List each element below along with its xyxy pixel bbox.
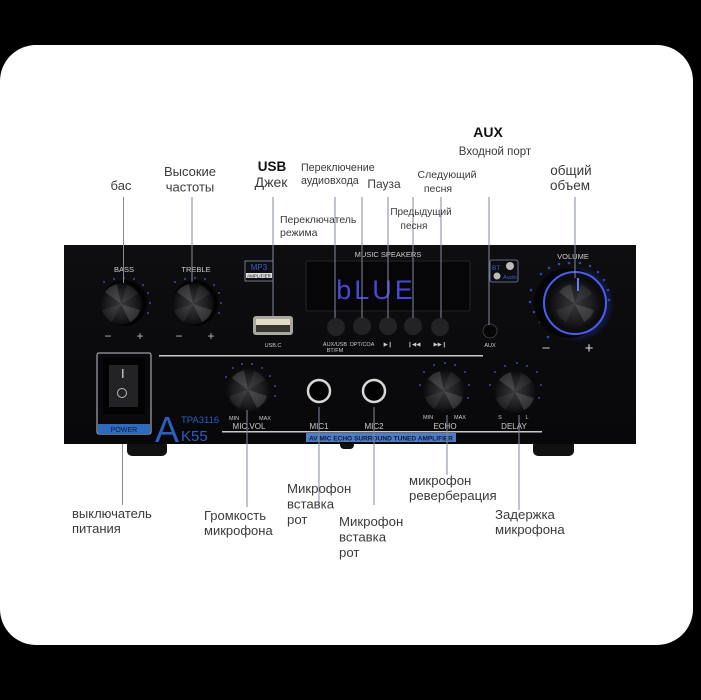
knob: volume bbox=[529, 252, 614, 357]
AK55 logo bbox=[155, 409, 219, 450]
label: next song: Следующий bbox=[418, 169, 477, 181]
label: mic delay: микрофона bbox=[495, 522, 565, 537]
callout labels top bbox=[111, 124, 592, 239]
knob: delay: S bbox=[498, 415, 502, 421]
label: mode switch: Переключатель bbox=[280, 214, 357, 226]
display: bLUE bbox=[336, 275, 416, 305]
label: AUX input: AUX bbox=[473, 124, 503, 140]
control buttons: AUX/USB bbox=[323, 342, 347, 348]
label: previous song: Предыдущий bbox=[390, 207, 452, 218]
control buttons: BT/FM bbox=[327, 348, 344, 354]
knob: echo: MAX bbox=[454, 415, 466, 421]
Bluetooth audio badge: BT bbox=[492, 265, 500, 272]
USB port: USB.C bbox=[265, 343, 281, 349]
MP3 badge: AMPLIFIER bbox=[247, 274, 272, 278]
amplifier device bbox=[64, 245, 636, 456]
control buttons: OPT/COA bbox=[350, 342, 375, 348]
knob: echo: ECHO bbox=[433, 422, 457, 431]
knob: treble: − bbox=[175, 329, 183, 343]
amplifier feet bbox=[127, 440, 574, 456]
MP3 badge: MP3 bbox=[251, 263, 268, 272]
label: pause: Пауза bbox=[367, 177, 401, 191]
knob: mic volume: MAX bbox=[259, 416, 271, 422]
knob: volume: + bbox=[585, 340, 594, 357]
knob: mic volume bbox=[225, 363, 276, 431]
power switch bbox=[97, 353, 151, 434]
knob: treble: + bbox=[207, 329, 215, 343]
knob: mic volume: MIC.VOL bbox=[233, 422, 266, 431]
display: MUSIC SPEAKERS bbox=[355, 250, 421, 259]
Bluetooth audio badge: Audio bbox=[503, 275, 517, 281]
USB port bbox=[253, 316, 293, 349]
label: audio input switch: Переключение bbox=[301, 162, 375, 174]
label: audio input switch: аудиовхода bbox=[301, 175, 359, 187]
callout lines bbox=[122, 197, 575, 510]
label: mic 2 input: вставка bbox=[339, 530, 387, 544]
label: mic 1 input: Микрофон bbox=[287, 481, 351, 496]
amplifier body bbox=[64, 245, 636, 444]
label: next song: песня bbox=[424, 183, 452, 195]
label: mic reverb: микрофон bbox=[409, 473, 471, 488]
knob: bass: + bbox=[136, 329, 144, 343]
knob: bass: BASS bbox=[114, 265, 134, 274]
AUX jack: AUX bbox=[484, 343, 496, 349]
label: mic volume: микрофона bbox=[204, 523, 273, 538]
control buttons: ▶▶❙ bbox=[433, 341, 447, 348]
label: previous song: песня bbox=[401, 221, 427, 232]
Bluetooth audio badge bbox=[490, 260, 518, 282]
label: treble: Высокие bbox=[164, 164, 216, 179]
control buttons bbox=[323, 317, 449, 354]
label: master volume: общий bbox=[550, 163, 592, 178]
knob: treble: TREBLE bbox=[181, 265, 211, 274]
jack: MIC1 bbox=[308, 380, 330, 431]
label: power switch: питания bbox=[72, 521, 121, 536]
knob: bass: − bbox=[104, 329, 112, 343]
label: bass: бас bbox=[111, 178, 132, 193]
AK55 logo: TPA3116 bbox=[181, 415, 219, 426]
label: AUX input: Входной порт bbox=[459, 146, 532, 158]
label: master volume: объем bbox=[550, 178, 590, 193]
label: mic delay: Задержка bbox=[495, 507, 556, 522]
label: mic 2 input: Микрофон bbox=[339, 514, 403, 529]
control buttons: ▶❙ bbox=[384, 341, 392, 348]
label: power switch: выключатель bbox=[72, 506, 152, 521]
label: mic volume: Громкость bbox=[204, 508, 266, 523]
label: mic 1 input: вставка bbox=[287, 496, 335, 512]
AK55 logo: A bbox=[155, 409, 179, 450]
knob: mic volume: MIN bbox=[229, 416, 239, 422]
AK55 logo: K55 bbox=[181, 428, 208, 445]
jack: MIC2 bbox=[363, 380, 385, 431]
MP3 badge bbox=[245, 261, 273, 281]
knob: echo: MIN bbox=[423, 415, 433, 421]
knob: delay bbox=[489, 362, 542, 431]
model strip: AV MIC ECHO SURROUND TUNED AMPLIFIER bbox=[309, 436, 453, 442]
label: mode switch: режима bbox=[280, 227, 318, 239]
knob: delay: DELAY bbox=[501, 422, 527, 431]
knob: bass bbox=[100, 265, 151, 343]
jack: MIC2: MIC2 bbox=[364, 422, 384, 431]
divider lines bbox=[159, 355, 542, 432]
AUX jack bbox=[483, 324, 497, 349]
label: mic 2 input: рот bbox=[339, 545, 359, 560]
knob: volume: − bbox=[542, 340, 551, 357]
callout labels bottom bbox=[72, 473, 565, 560]
jack: MIC1: MIC1 bbox=[309, 422, 329, 431]
knob: delay: L bbox=[525, 415, 529, 421]
knob: volume: VOLUME bbox=[557, 252, 589, 261]
power switch: POWER bbox=[111, 427, 137, 434]
label: treble: частоты bbox=[166, 180, 214, 194]
label: mic 1 input: рот bbox=[287, 512, 307, 527]
label: USB jack: USB bbox=[258, 159, 286, 174]
display bbox=[306, 250, 470, 311]
label: USB jack: Джек bbox=[255, 174, 288, 190]
control buttons: ❙◀◀ bbox=[407, 341, 421, 348]
label: mic reverb: реверберация bbox=[409, 488, 497, 503]
knob: echo bbox=[419, 362, 470, 431]
knob: treble bbox=[172, 265, 222, 343]
